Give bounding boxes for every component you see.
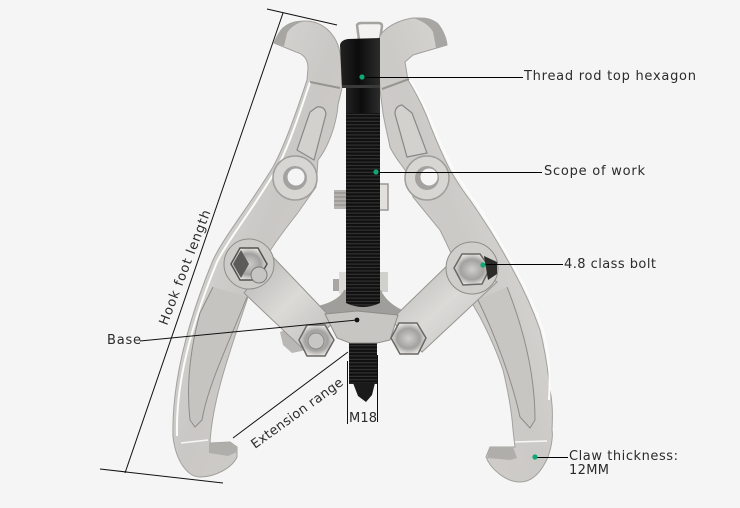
callout: base: Base [107, 333, 141, 348]
callout: thread rod top hexagon [359, 69, 696, 84]
left link plate [244, 256, 335, 348]
callout: extension range: Extension range [249, 375, 346, 452]
dimension: hook foot length lines [100, 9, 337, 483]
rear bolts and brackets [333, 184, 388, 294]
lower right bolt [391, 323, 426, 354]
icon: gear puller tool [173, 18, 552, 482]
arm lower groove [478, 287, 535, 428]
base plate [325, 311, 398, 343]
arm lower groove [188, 287, 247, 427]
callout: scope of work: Scope of work [544, 164, 645, 179]
callout: claw thickness: 12MM [569, 463, 609, 478]
callout: claw thickness [532, 449, 678, 478]
callout: scope of work [373, 164, 645, 179]
callout: claw thickness: Claw thickness: [569, 449, 678, 464]
right arm [378, 18, 552, 482]
callout: 4.8 class bolt: 4.8 class bolt [564, 257, 656, 272]
callout: extension range [233, 352, 348, 452]
rear base wings [318, 290, 402, 325]
left arm [173, 21, 342, 477]
callout: base [107, 318, 359, 348]
arm slot [297, 107, 326, 160]
upper right bolt [446, 242, 498, 294]
dimension: M18 thread diameter [348, 355, 378, 426]
pivot hole boss [273, 156, 317, 200]
upper left nut [224, 239, 274, 289]
top tab of rod [357, 23, 382, 40]
pivot hole boss [405, 156, 449, 200]
callout: thread rod top hexagon: Thread rod top hexagon [523, 69, 696, 84]
lower left nut [299, 325, 334, 356]
arm slot [395, 105, 427, 157]
right link plate [391, 258, 497, 352]
threaded rod [340, 38, 380, 307]
callout: 4.8 class bolt [480, 257, 656, 272]
label: hook foot length: Hook foot length [157, 208, 214, 327]
rod lower end [349, 340, 377, 402]
dimension: M18 thread diameter: M18 [349, 411, 377, 426]
